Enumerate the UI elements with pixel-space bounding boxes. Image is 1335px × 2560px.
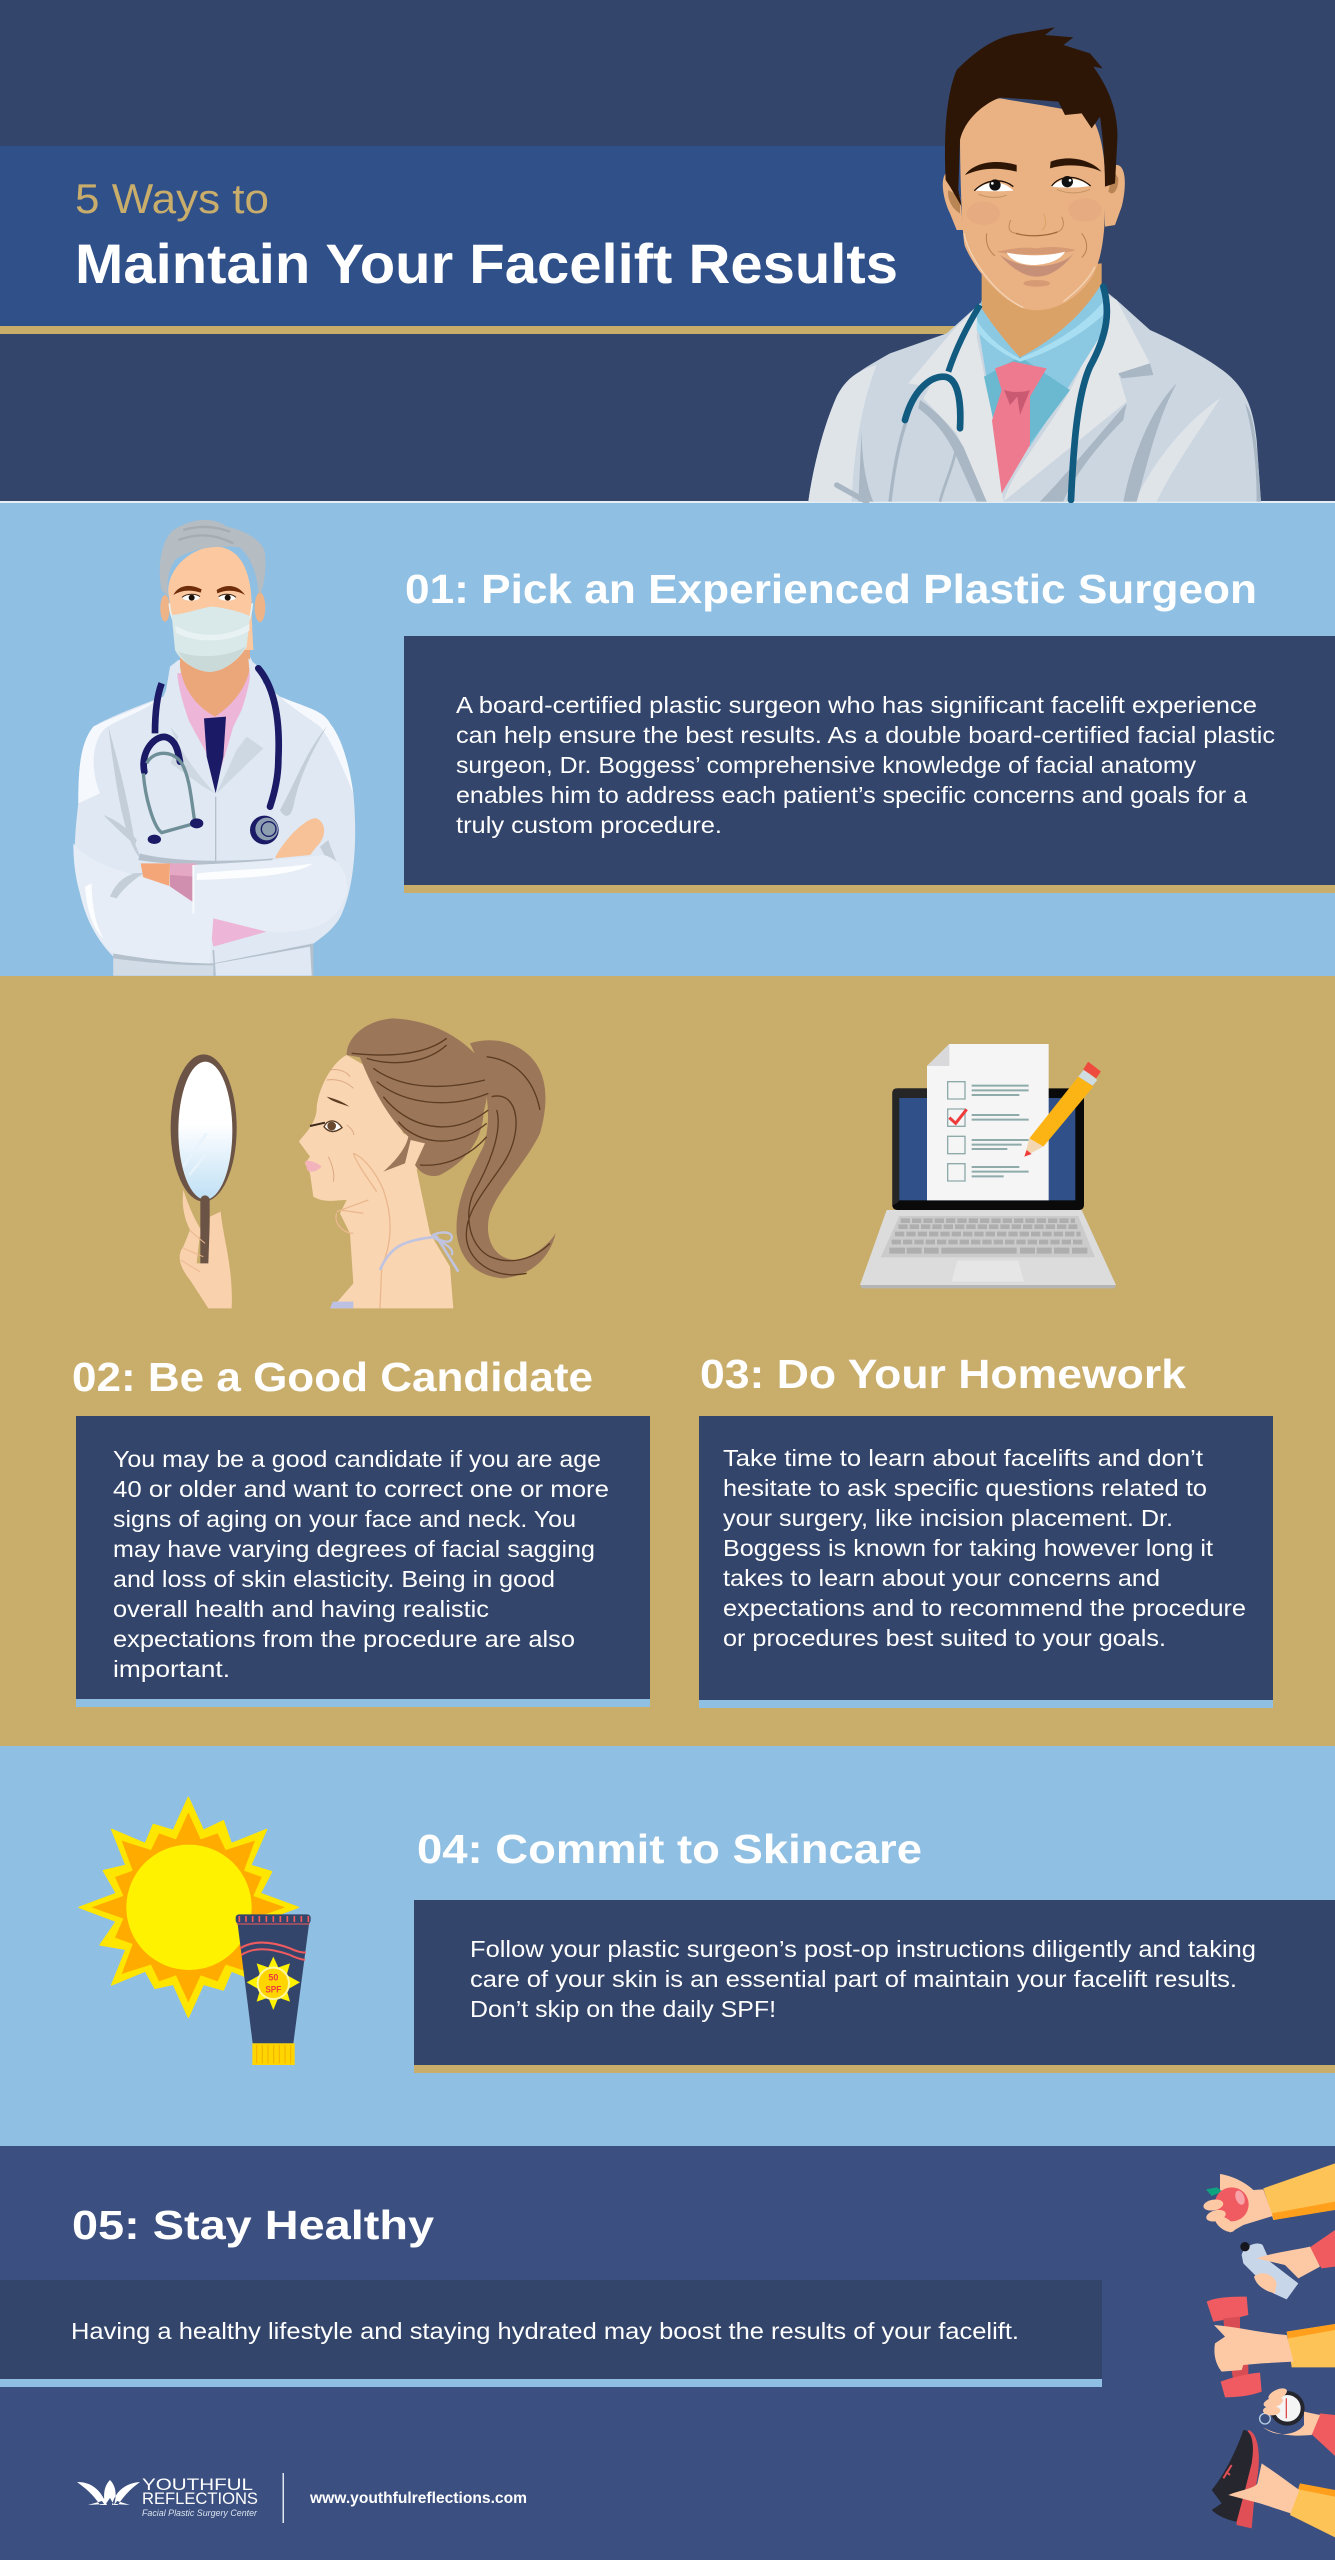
panel: step 4 body: care of your skin is an essential part of maintain your facelift results.: [470, 1966, 1237, 1992]
icon: hand with dumbbell: [1207, 2297, 1335, 2397]
panel: step 2 body: overall health and having realistic: [113, 1596, 489, 1622]
section 4 background: [0, 1746, 1335, 2146]
illustration: sun and sunscreen tube: SPF: [265, 1985, 282, 1995]
icon: lotus mark: [77, 2480, 140, 2505]
panel: step 3 body: [699, 1416, 1273, 1708]
heading: step 2: 02: Be a Good Candidate: [72, 1354, 593, 1400]
main title: Maintain Your Facelift Results: [75, 232, 898, 295]
panel: step 1 body: enables him to address each patient’s specific concerns and goals for a: [456, 782, 1247, 808]
section 5 background: [0, 2146, 1335, 2560]
icon: hand with running shoe: [1212, 2430, 1335, 2537]
heading: step 5: 05: Stay Healthy: [72, 2202, 434, 2248]
panel: step 3 body: expectations and to recommend the procedure: [723, 1595, 1246, 1621]
icon: hand with water bottle: [1240, 2230, 1335, 2299]
illustration: sun and sunscreen tube: 50: [268, 1973, 278, 1983]
panel: step 2 body: 40 or older and want to correct one or more: [113, 1476, 609, 1502]
panel: step 3 body: hesitate to ask specific questions related to: [723, 1475, 1207, 1501]
footer logo: REFLECTIONS: [142, 2489, 258, 2508]
illustration: woman looking in hand mirror: [171, 1018, 556, 1308]
panel: step 1 body: [404, 636, 1335, 893]
panel: step 3 body: your surgery, like incision placement. Dr.: [723, 1505, 1173, 1531]
panel: step 4 body: [414, 1900, 1335, 2073]
panel: step 2 body: [76, 1416, 650, 1707]
panel: step 1 body: surgeon, Dr. Boggess’ comprehensive knowledge of facial anatomy: [456, 752, 1197, 778]
panel: step 4 body: Follow your plastic surgeon’s post-op instructions diligently and taking: [470, 1936, 1256, 1962]
illustration: sun and sunscreen tube: [79, 1797, 311, 2065]
heading: step 4: 04: Commit to Skincare: [417, 1826, 922, 1872]
heading: step 1: 01: Pick an Experienced Plastic Surgeon: [405, 566, 1257, 612]
footer logo: YOUTHFUL: [142, 2475, 253, 2494]
panel: step 5 body: Having a healthy lifestyle and staying hydrated may boost the results of your facelift.: [71, 2318, 1019, 2344]
panel: step 2 body: and loss of skin elasticity. Being in good: [113, 1566, 555, 1592]
section 1 background: [0, 503, 1335, 976]
panel: step 2 body: You may be a good candidate if you are age: [113, 1446, 601, 1472]
header background: [0, 0, 1335, 502]
section 2-3 background: [0, 976, 1335, 1746]
panel: step 2 body: expectations from the procedure are also: [113, 1626, 575, 1652]
panel: step 3 body: takes to learn about your concerns and: [723, 1565, 1160, 1591]
title banner: [0, 146, 990, 334]
footer website: www.youthfulreflections.com: [309, 2490, 527, 2507]
panel: step 3 body: Boggess is known for taking however long it: [723, 1535, 1214, 1561]
panel: step 4 body: Don’t skip on the daily SPF!: [470, 1996, 776, 2022]
icon: hand with stopwatch: [1260, 2386, 1335, 2456]
panel: step 1 body: A board-certified plastic surgeon who has significant facelift experience: [456, 692, 1257, 718]
illustration: checklist on laptop: [860, 1044, 1116, 1288]
illustration: hands holding healthy-lifestyle items: [1203, 2163, 1335, 2537]
illustration: smiling doctor: [808, 27, 1261, 502]
heading: step 3: 03: Do Your Homework: [700, 1351, 1186, 1397]
illustration: masked doctor with crossed arms: [73, 520, 355, 976]
panel: step 5 body: [0, 2280, 1102, 2387]
panel: step 2 body: important.: [113, 1656, 230, 1682]
footer logo: [77, 2475, 258, 2518]
panel: step 3 body: Take time to learn about facelifts and don’t: [723, 1445, 1204, 1471]
panel: step 3 body: or procedures best suited to your goals.: [723, 1625, 1166, 1651]
panel: step 2 body: may have varying degrees of facial sagging: [113, 1536, 595, 1562]
footer logo: Facial Plastic Surgery Center: [142, 2508, 258, 2518]
panel: step 1 body: truly custom procedure.: [456, 812, 722, 838]
panel: step 1 body: can help ensure the best results. As a double board-certified facial plastic: [456, 722, 1275, 748]
title kicker: 5 Ways to: [75, 175, 269, 222]
panel: step 2 body: signs of aging on your face and neck. You: [113, 1506, 576, 1532]
icon: hand with apple: [1203, 2163, 1335, 2235]
